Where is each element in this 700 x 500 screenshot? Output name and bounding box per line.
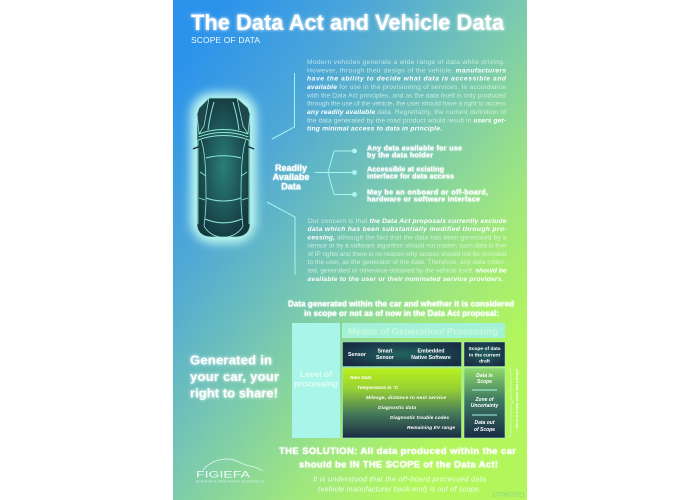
panel: data types staircase: Temperature in °C [357, 385, 399, 391]
intro paragraph [306, 59, 507, 133]
solution statement [279, 446, 516, 470]
panel: level of processing: processing [294, 378, 338, 388]
panel: scope levels: of Scope [474, 427, 495, 433]
panel: scope levels: Scope [477, 379, 492, 385]
panel: scope levels: Uncertainty [471, 403, 498, 409]
intro paragraph: However, through their design of the vehicle, manufacturers [307, 67, 506, 74]
icon: car top view [193, 98, 254, 237]
label: readily available data: Readily [275, 163, 307, 173]
poster background [173, 0, 527, 500]
table heading [288, 300, 514, 318]
panel: scope levels: Zone of [474, 397, 495, 403]
scope footnote [313, 474, 486, 494]
concern paragraph: to the user, as the generator of the data. Therefore, any data collec- [308, 259, 506, 266]
intro paragraph: any readily available data. Regrettably, the current definition of [307, 109, 506, 116]
concern paragraph [308, 218, 507, 283]
intro paragraph: ting minimal access to data in principle. [307, 126, 442, 133]
logo: FIGIEFA: Automotive Aftermarket Distributors [196, 480, 264, 484]
panel: data types staircase [342, 368, 462, 438]
panel: scope levels: Data in [476, 373, 493, 379]
logo: FIGIEFA: FIGIEFA [196, 470, 250, 480]
readily available data criteria list: May be an onboard or off-board, [367, 188, 488, 196]
connector lines around the readily available data label [267, 73, 295, 275]
bracket and vertical note: Affected data where data is in scope [515, 369, 519, 429]
concern paragraph: of IP rights and there is no reason why access should not be provided [308, 251, 507, 258]
panel: sensors and software: Sensor [376, 355, 394, 361]
panel: level of processing [292, 323, 340, 438]
solution statement: THE SOLUTION: All data produced within the car [279, 446, 516, 457]
date stamp: 17/06/2021 [492, 492, 525, 498]
branching connector with dots [315, 148, 357, 197]
panel: sensors and software [342, 342, 462, 366]
intro paragraph: with the Data Act principles, and as the data itself is only produced [306, 92, 506, 99]
panel: scope levels: Data out [474, 420, 495, 426]
readily available data criteria list [367, 144, 488, 204]
panel: scope of data header: in the current [469, 352, 500, 358]
table heading: in scope or not as of now in the Data Act proposal: [304, 309, 499, 318]
label: readily available data [273, 163, 309, 192]
panel: data types staircase: Diagnostic trouble codes [390, 415, 449, 421]
label: readily available data: Data [281, 182, 302, 192]
logo: FIGIEFA [196, 459, 264, 484]
intro paragraph: available for use in the provisioning of services. In accordance [307, 84, 506, 91]
concern paragraph: data which has been substantially modified through pro- [308, 226, 507, 233]
panel: means of generation header [342, 323, 505, 338]
slogan: Generated in [190, 352, 272, 368]
panel: data types staircase: Remaining EV range [407, 425, 455, 431]
panel: data types staircase: Mileage, distance to next service [366, 395, 446, 401]
bracket and vertical note [508, 369, 519, 437]
panel: sensors and software: Native Software [411, 355, 451, 361]
panel: scope of data header: draft [479, 359, 490, 365]
slogan: right to share! [190, 386, 278, 400]
readily available data criteria list: hardware or software interface [367, 194, 480, 204]
readily available data criteria list: Any data available for use [367, 144, 462, 152]
panel: scope levels [464, 368, 505, 438]
readily available data criteria list: by the data holder [367, 150, 433, 160]
table heading: Data generated within the car and whether it is considered [288, 300, 514, 308]
intro paragraph: Modern vehicles generate a wide range of data while driving. [307, 59, 505, 66]
scope footnote: (vehicle manufacturer back-end) is out of scope. [318, 484, 481, 494]
solution statement: should be IN THE SCOPE of the Data Act! [299, 460, 498, 470]
panel: data types staircase: Raw Data [350, 375, 372, 381]
title: The Data Act and Vehicle Data [191, 10, 505, 35]
label: readily available data: Availabe [273, 172, 309, 182]
readily available data criteria list: Accessible at existing [367, 164, 444, 174]
concern paragraph: cessing, although the fact that the data has been generated by a [308, 234, 507, 242]
panel: means of generation header: Means of Generation/ Processing [348, 326, 498, 338]
intro paragraph: the data generated by the road product would result in users get- [307, 117, 507, 124]
readily available data criteria list: interface for data access [367, 172, 454, 180]
intro paragraph: through the use of the vehicle, the user should have a right to access [307, 101, 507, 108]
panel: sensors and software: Sensor [348, 352, 366, 358]
panel: sensors and software: Embedded [417, 349, 445, 355]
panel: sensors and software: Smart [377, 349, 393, 355]
panel: scope of data header [464, 342, 505, 366]
subtitle: SCOPE OF DATA [191, 35, 260, 45]
concern paragraph: ted, generated or otherwise obtained by the vehicle itself, should be [308, 268, 507, 274]
concern paragraph: sensor or by a software algorithm should not matter; such data is free [308, 243, 507, 250]
panel: data types staircase: Diagnostic data [378, 405, 416, 411]
slogan [190, 352, 279, 400]
concern paragraph: Our concern is that the Data Act proposals currently exclude [308, 218, 507, 225]
concern paragraph: available to the user or their nominated service providers. [308, 276, 504, 283]
scope footnote: It is understood that the off-board processed data [313, 474, 486, 484]
car halo [191, 93, 256, 243]
intro paragraph: have the ability to decide what data is accessible and [307, 76, 507, 83]
panel: level of processing: Level of [300, 369, 332, 379]
panel: scope of data header: Scope of data [468, 346, 501, 352]
slogan: your car, your [190, 369, 279, 384]
